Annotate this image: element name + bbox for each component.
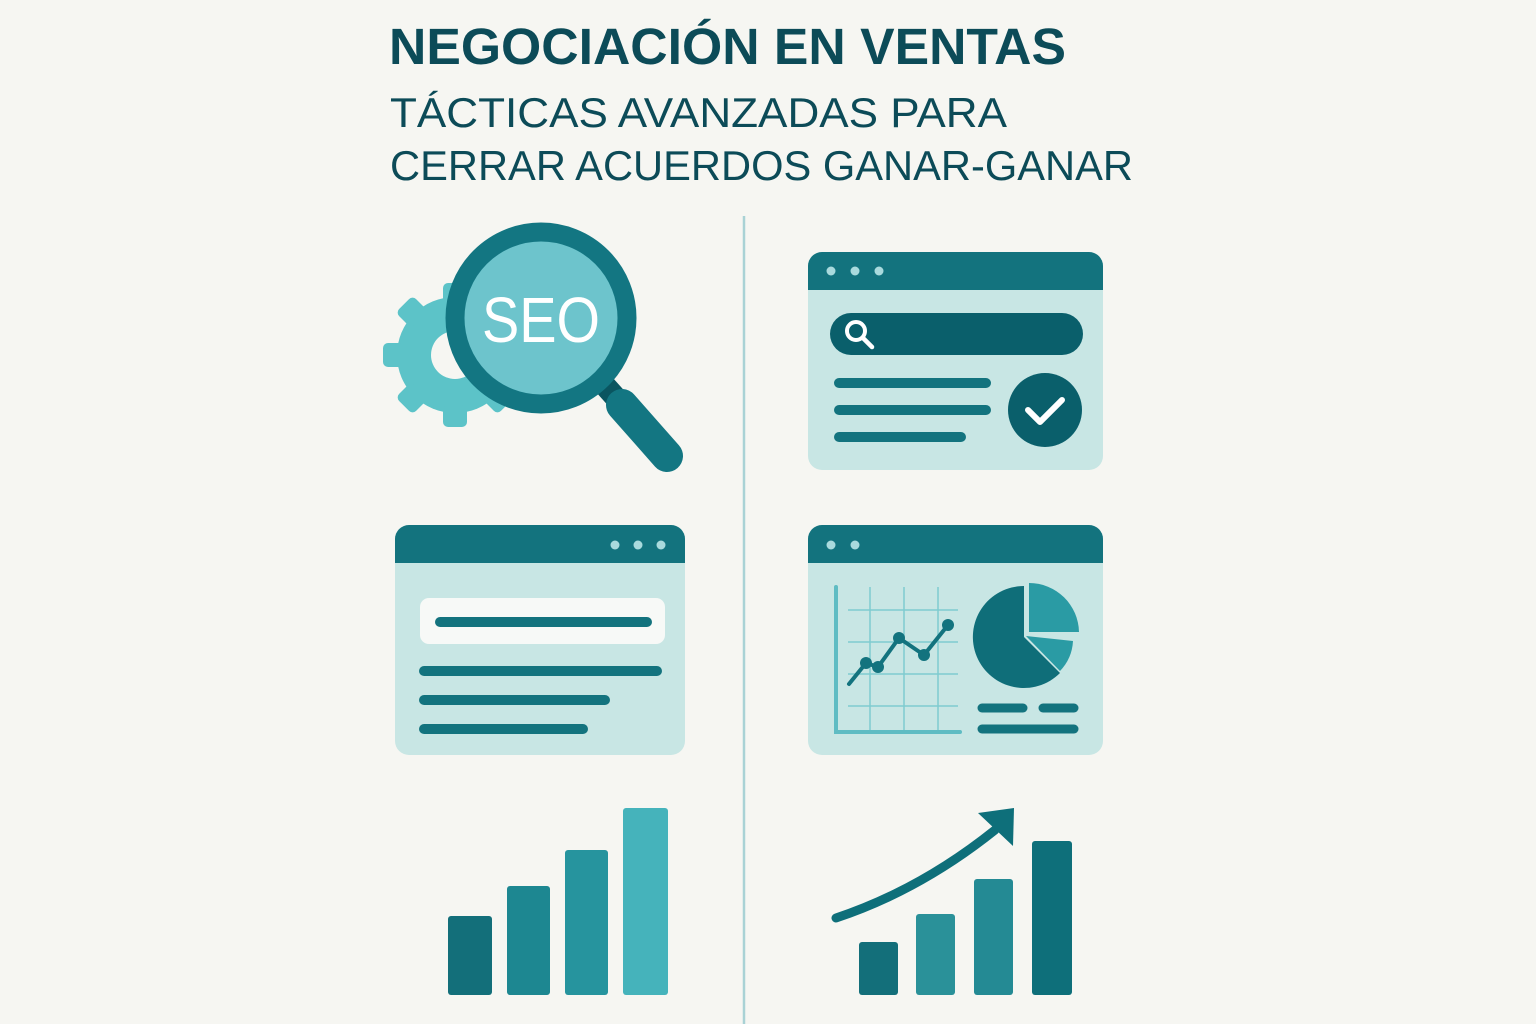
title: NEGOCIACIÓN EN VENTAS bbox=[389, 18, 1066, 75]
icon: search browser bbox=[808, 252, 1103, 470]
icon: analytics browser bbox=[808, 525, 1103, 755]
icon: SEO gear and magnifier: SEO bbox=[482, 284, 600, 356]
title bbox=[389, 18, 1133, 189]
icon: text browser bbox=[395, 525, 685, 755]
bar chart: left bbox=[448, 808, 668, 995]
subtitle bbox=[390, 89, 1133, 189]
subtitle: CERRAR ACUERDOS GANAR-GANAR bbox=[390, 142, 1133, 189]
subtitle: TÁCTICAS AVANZADAS PARA bbox=[390, 89, 1007, 136]
icon: SEO gear and magnifier bbox=[383, 232, 667, 456]
bar chart: right with growth arrow bbox=[836, 808, 1072, 995]
